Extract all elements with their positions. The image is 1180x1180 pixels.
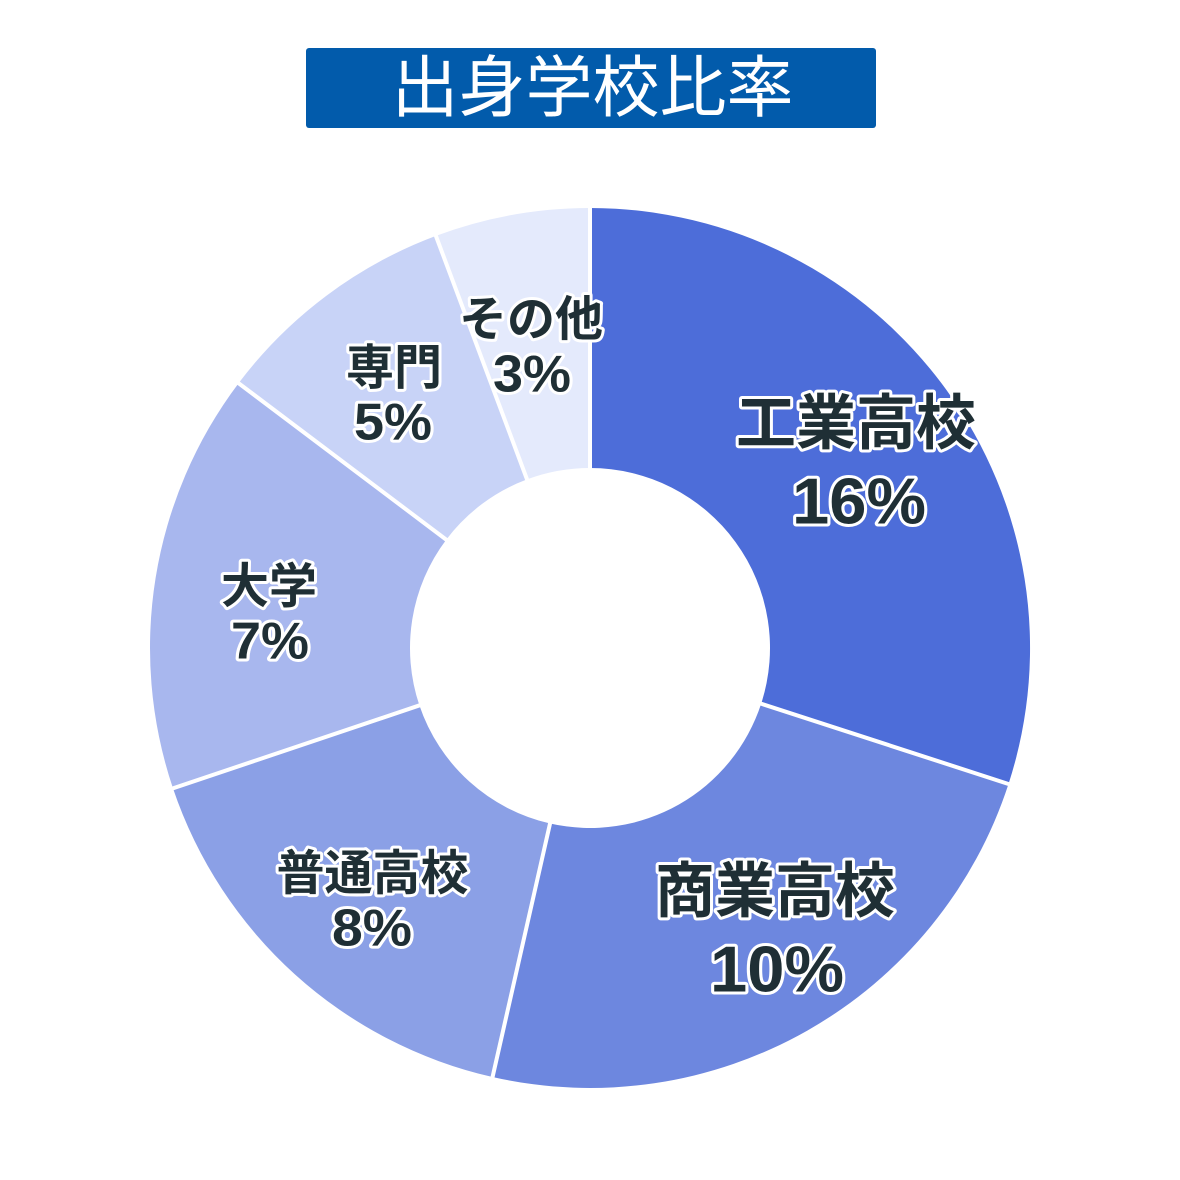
segment: 専門 [239, 236, 527, 540]
title banner: 出身学校比率 [392, 51, 794, 126]
segment: 普通高校 [173, 705, 550, 1077]
segment: 大学 [150, 383, 446, 788]
label: 工業高校 16%: 工業高校 [736, 390, 976, 457]
segment dividers [171, 206, 1010, 1080]
label: その他 3%: 3% [493, 346, 571, 404]
segment: 商業高校 [492, 704, 1008, 1088]
label: 専門 5%: 5% [354, 394, 432, 452]
title banner [306, 48, 876, 128]
label: 大学 7% [221, 560, 317, 670]
segment: その他 [436, 208, 590, 479]
label: 大学 7%: 7% [231, 612, 309, 670]
label: 工業高校 16%: 16% [792, 464, 926, 538]
label: その他 3% [459, 294, 603, 404]
label: 普通高校 8% [276, 848, 469, 958]
label: 大学 7%: 大学 [221, 560, 317, 614]
label: 商業高校 10%: 商業高校 [655, 858, 895, 925]
label: 専門 5%: 専門 [346, 342, 442, 395]
label: 商業高校 10%: 10% [710, 932, 844, 1006]
label: 工業高校 16% [736, 390, 976, 538]
label: その他 3%: その他 [459, 294, 603, 346]
label: 商業高校 10% [655, 858, 895, 1006]
segment: 工業高校 [590, 208, 1030, 784]
donut chart [150, 206, 1030, 1088]
label: 普通高校 8%: 普通高校 [276, 848, 469, 900]
label: 普通高校 8%: 8% [332, 900, 412, 958]
label: 専門 5% [346, 342, 442, 452]
